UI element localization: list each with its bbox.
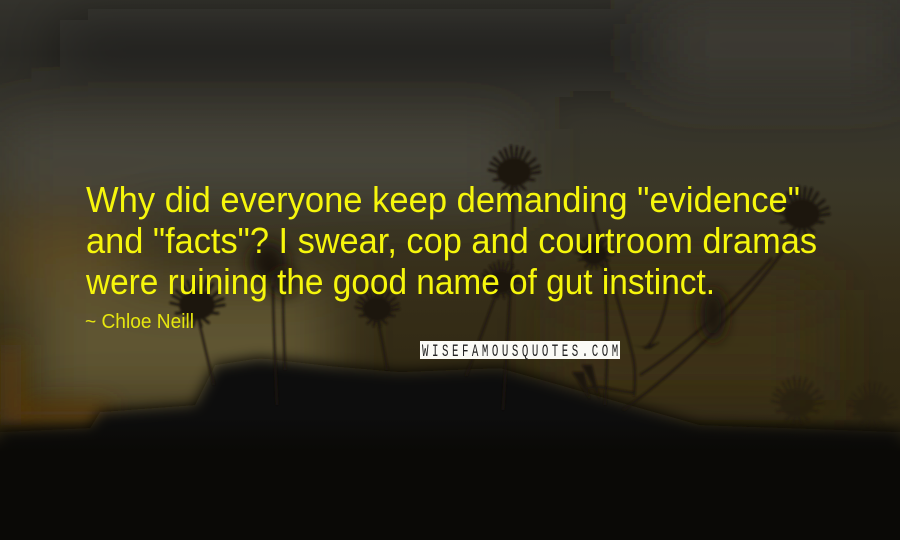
quote text (85, 179, 817, 302)
watermark badge: WISEFAMOUSQUOTES.COM (422, 343, 618, 362)
author attribution: ~ Chloe Neill (85, 311, 194, 333)
quote line 3: were ruining the good name of gut instinct. (85, 261, 715, 302)
blurred out-of-focus seed heads (249, 242, 897, 426)
dark ground silhouette (0, 358, 900, 540)
quote line 2: and "facts"? I swear, cop and courtroom dramas (86, 220, 817, 261)
plant silhouettes (171, 146, 829, 410)
quote line 1: Why did everyone keep demanding "evidence" (86, 179, 800, 220)
